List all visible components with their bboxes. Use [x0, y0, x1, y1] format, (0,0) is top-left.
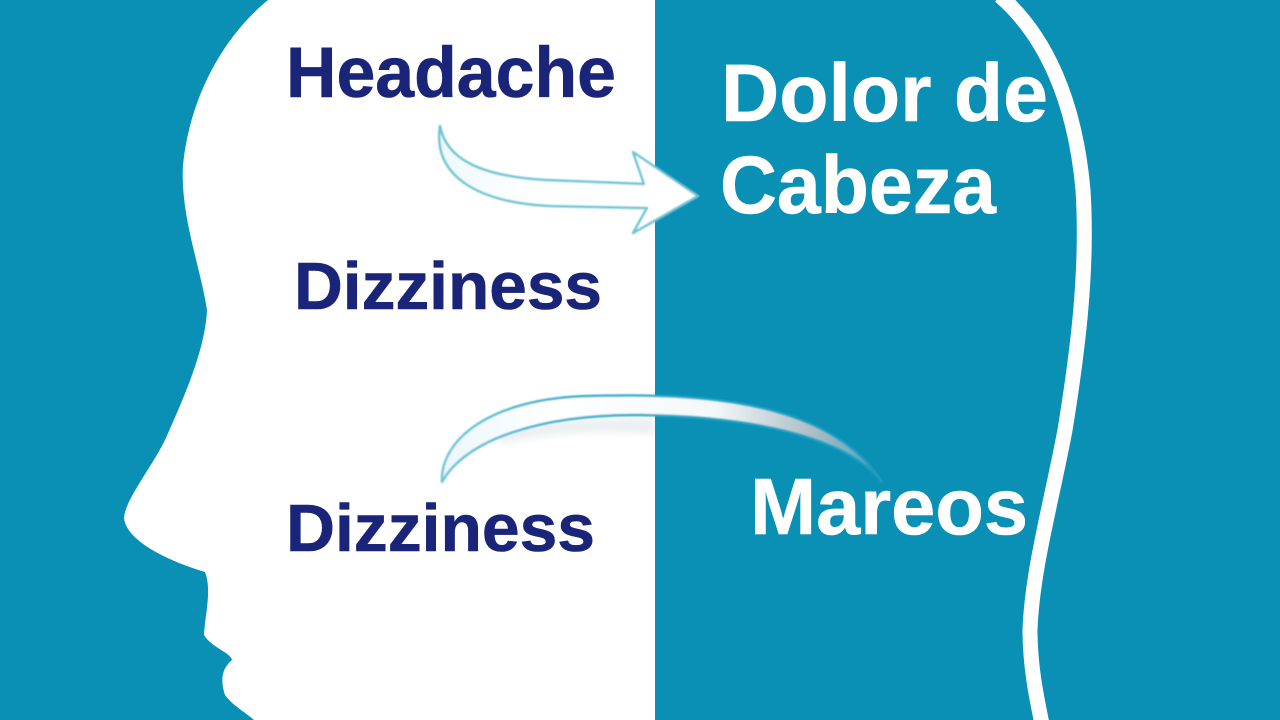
heading: Headache: Headache: [286, 34, 616, 113]
label: Dizziness lower: Dizziness: [286, 491, 595, 566]
heading: Dolor de Cabeza: Dolor de: [721, 48, 1048, 139]
heading: Dolor de Cabeza: Cabeza: [720, 140, 997, 231]
label: Mareos: Mareos: [750, 462, 1028, 551]
head silhouette left half: [124, 0, 655, 720]
arrow: Dizziness to Mareos: [442, 395, 882, 482]
heading: Dolor de Cabeza: [720, 48, 1048, 231]
arrow: Headache to Dolor de Cabeza: [439, 126, 698, 233]
head outline right side: [1000, 0, 1084, 720]
label: Dizziness upper: Dizziness: [294, 249, 602, 324]
